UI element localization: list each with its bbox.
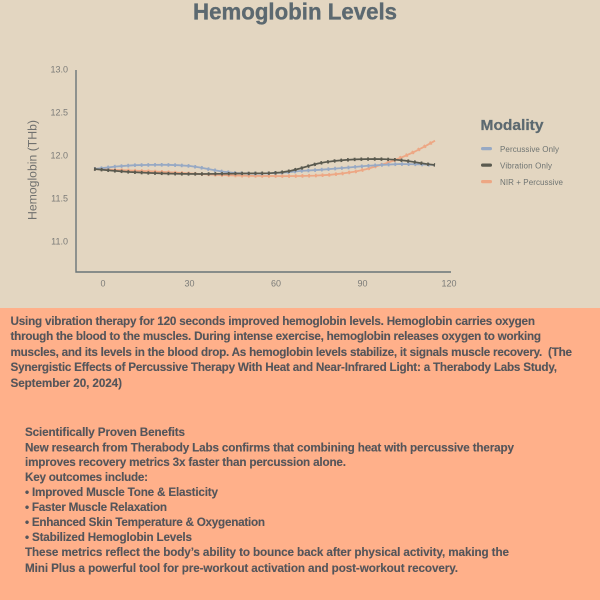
legend item: NIR + Percussive: NIR + Percussive (500, 178, 564, 187)
y axis tick labels: 13.0 (50, 64, 68, 74)
text block: hemoglobin explanation: September 20, 2024) (10, 377, 122, 390)
text block: scientifically proven benefits: Key outcomes include: (25, 471, 148, 484)
text block: scientifically proven benefits: • Improved Muscle Tone & Elasticity (25, 486, 218, 499)
x axis tick labels: 0 (100, 278, 106, 288)
line chart (28, 64, 457, 288)
text block: scientifically proven benefits (25, 426, 514, 575)
axes (76, 70, 451, 272)
x axis tick labels: 120 (441, 278, 457, 288)
legend title: Modality (480, 117, 544, 134)
panel: text background (0, 308, 600, 600)
y axis tick labels: 12.5 (50, 108, 68, 118)
x axis tick labels: 30 (184, 278, 195, 288)
x axis tick labels: 90 (357, 278, 368, 288)
y axis tick labels (50, 64, 68, 246)
text block: hemoglobin explanation: Using vibration therapy for 120 seconds improved hemoglobin levels. Hemoglobin carries oxygen (10, 315, 535, 328)
y axis title: Hemoglobin (THb) (28, 120, 40, 220)
text block: hemoglobin explanation: Synergistic Effects of Percussive Therapy With Heat and Near-Infrared Light: a Therabody Labs Study, (10, 361, 557, 374)
text block: scientifically proven benefits: • Stabilized Hemoglobin Levels (25, 531, 192, 544)
series: Vibration Only (94, 159, 435, 174)
text block: hemoglobin explanation: through the blood to the muscles. During intense exercise, hemoglobin releases oxygen to working (10, 330, 541, 343)
text block: scientifically proven benefits: improves recovery metrics 3x faster than percussion alone. (25, 456, 346, 469)
series: Percussive Only (94, 164, 435, 174)
text block: scientifically proven benefits: • Faster Muscle Relaxation (25, 501, 167, 514)
text block: hemoglobin explanation: muscles, and its levels in the blood drop. As hemoglobin levels stabilize, it signals muscle recovery. (The (10, 346, 572, 359)
text block: scientifically proven benefits: Mini Plus a powerful tool for pre-workout activation and post-workout recovery. (25, 562, 458, 575)
y axis tick labels: 12.0 (50, 150, 68, 160)
text block: scientifically proven benefits: New research from Therabody Labs confirms that combining heat with percussive therapy (25, 442, 514, 454)
legend item: Percussive Only: Percussive Only (500, 145, 559, 154)
text block: scientifically proven benefits: These metrics reflect the body’s ability to bounce back after physical activity, making the (25, 546, 509, 559)
series: NIR + Percussive (94, 141, 435, 176)
y axis tick labels: 11.5 (51, 194, 68, 204)
text block: scientifically proven benefits: Scientifically Proven Benefits (25, 426, 185, 439)
y axis tick labels: 11.0 (51, 236, 68, 246)
legend (480, 117, 564, 187)
legend item: Vibration Only: Vibration Only (500, 162, 552, 170)
text block: scientifically proven benefits: • Enhanced Skin Temperature & Oxygenation (25, 516, 265, 529)
text block: hemoglobin explanation (10, 315, 572, 390)
x axis tick labels: 60 (271, 278, 281, 288)
x axis tick labels (100, 278, 457, 288)
